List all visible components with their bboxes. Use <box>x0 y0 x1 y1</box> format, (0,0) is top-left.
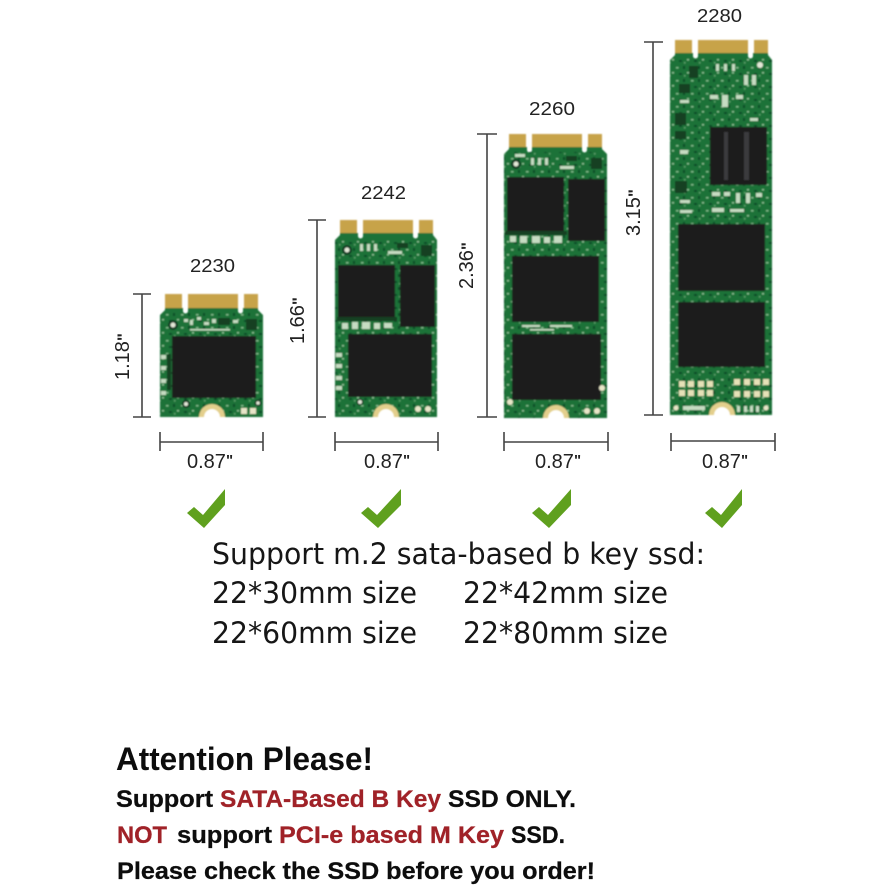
notice line 1: SATA-Based B Key <box>220 786 442 813</box>
width dimension 0.87 inch: " <box>741 452 748 469</box>
notice line 3: Please check the SSD before you order! <box>117 858 595 885</box>
height dimension 1.18 inch: 1.18" <box>112 333 134 380</box>
text block: supported sizes: 22*80mm size <box>463 616 668 650</box>
text block: supported sizes <box>212 537 705 650</box>
icon: check mark <box>361 489 401 528</box>
width dimension 0.87 inch: 0.87 <box>364 451 403 473</box>
height dimension 1.18 inch <box>112 294 151 417</box>
notice line 1 <box>116 786 576 813</box>
width dimension 0.87 inch: 0.87 <box>535 451 574 473</box>
height dimension 2.36 inch <box>456 134 497 417</box>
circuit board 2260 <box>504 134 607 418</box>
heading: Attention Please! <box>116 741 373 777</box>
notice line 2: support <box>177 822 272 849</box>
width dimension 0.87 inch: 0.87 <box>187 451 226 473</box>
notice line 2: SSD. <box>511 822 565 849</box>
text block: supported sizes: 22*30mm size <box>212 576 417 610</box>
icon: check mark <box>705 489 742 528</box>
circuit board 2230 <box>160 294 263 417</box>
width dimension 0.87 inch: " <box>226 452 233 469</box>
circuit board 2280 <box>670 40 772 415</box>
text block: supported sizes: 22*42mm size <box>463 576 668 610</box>
width dimension 0.87 inch: " <box>403 452 410 469</box>
notice line 1: Support <box>116 786 213 813</box>
size label 2242: 2242 <box>361 183 406 203</box>
height dimension 3.15 inch: 3.15" <box>623 189 645 236</box>
notice line 2 <box>117 822 565 849</box>
notice line 2: NOT <box>117 822 167 849</box>
callout: attention notice <box>116 741 595 885</box>
width dimension 0.87 inch <box>671 433 775 473</box>
SSD module 2230 <box>112 256 263 528</box>
height dimension 2.36 inch: 2.36" <box>456 242 478 289</box>
SSD module 2242 <box>287 183 438 528</box>
size label 2260: 2260 <box>529 99 575 119</box>
size label 2230: 2230 <box>190 256 235 276</box>
width dimension 0.87 inch <box>335 432 438 473</box>
height dimension 3.15 inch <box>623 42 663 415</box>
width dimension 0.87 inch <box>504 432 608 473</box>
icon: check mark <box>187 489 225 528</box>
height dimension 1.66 inch <box>287 220 326 417</box>
width dimension 0.87 inch: " <box>574 452 581 469</box>
SSD module 2280 <box>623 6 775 528</box>
SSD module 2260 <box>456 99 608 528</box>
notice line 1: SSD ONLY. <box>448 786 576 813</box>
circuit board 2242 <box>335 220 437 417</box>
size label 2280: 2280 <box>697 6 742 26</box>
notice line 2: PCI-e based M Key <box>279 822 505 849</box>
width dimension 0.87 inch <box>160 432 263 473</box>
text block: supported sizes: Support m.2 sata-based b key ssd: <box>212 537 705 571</box>
height dimension 1.66 inch: 1.66" <box>287 297 309 344</box>
icon: check mark <box>532 489 571 528</box>
text block: supported sizes: 22*60mm size <box>212 616 417 650</box>
width dimension 0.87 inch: 0.87 <box>702 451 741 473</box>
